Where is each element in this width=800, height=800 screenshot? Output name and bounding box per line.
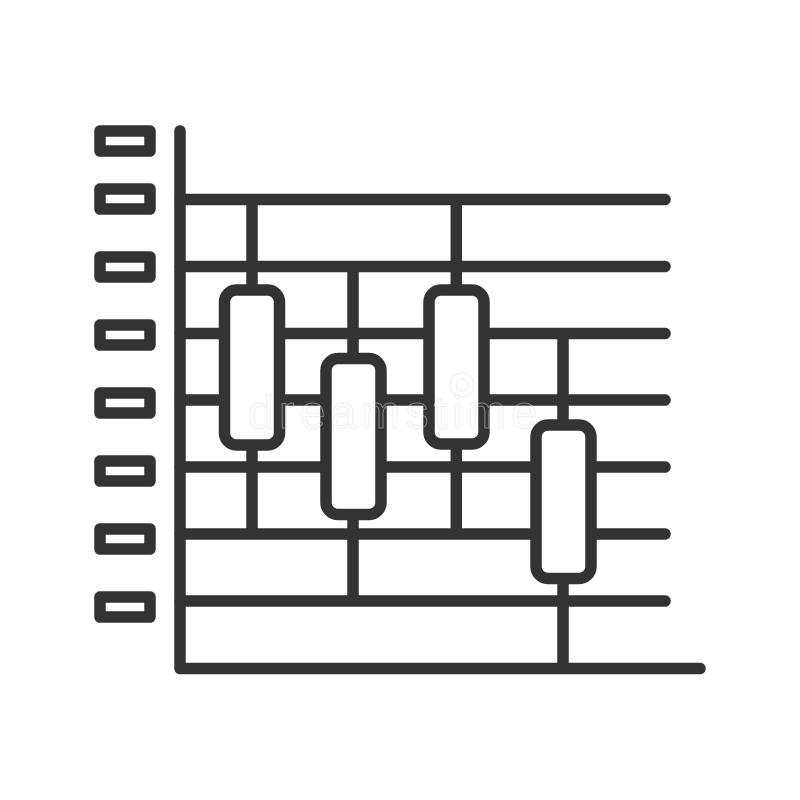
legend: axis tick labels <box>100 131 150 617</box>
watermark: dreamstime <box>248 386 537 438</box>
chart axes <box>180 131 700 668</box>
candle wicks <box>252 200 563 668</box>
grid lines <box>180 200 665 601</box>
candle bodies <box>224 290 591 578</box>
